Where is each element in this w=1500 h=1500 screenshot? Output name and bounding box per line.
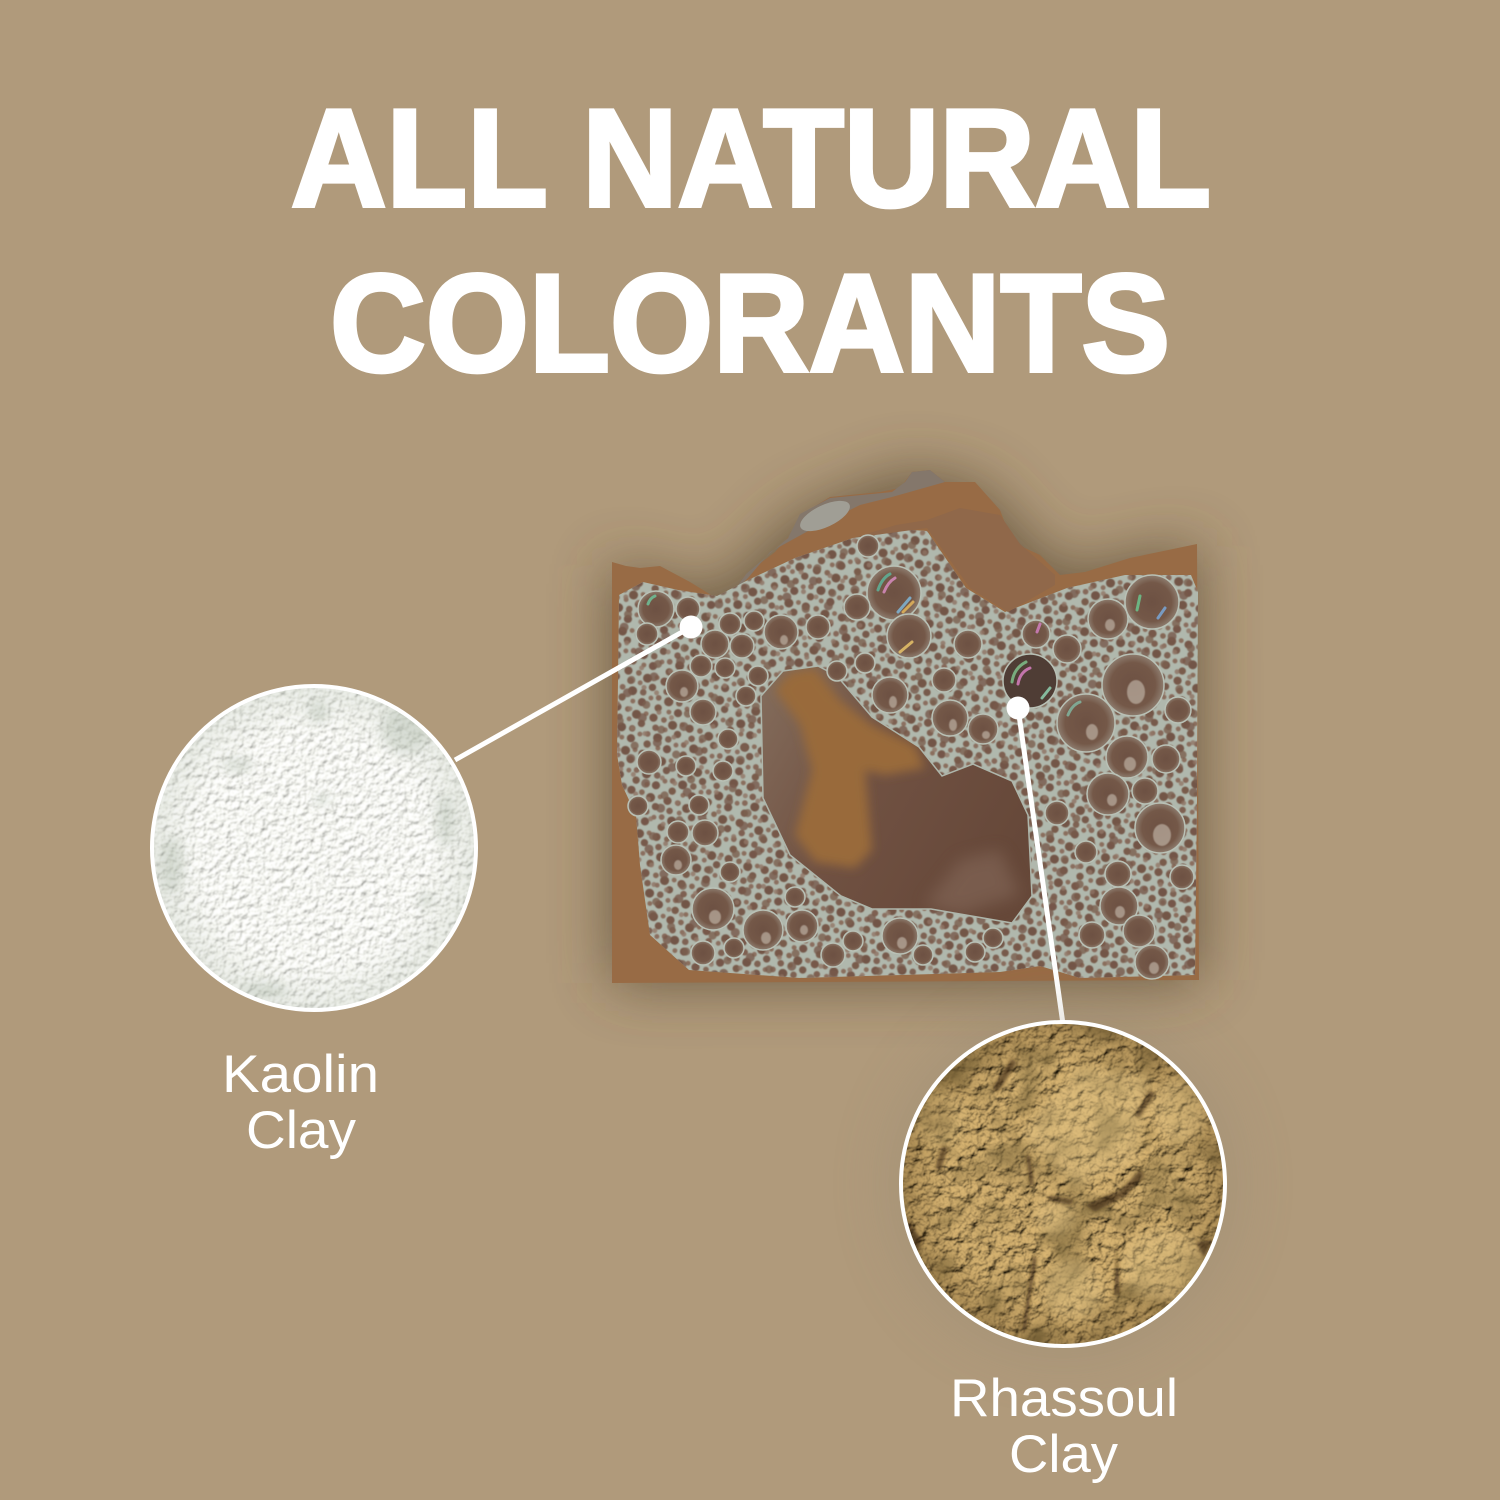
pale marks [932,852,1016,914]
connector line: rhassoul [1018,708,1063,1024]
kaolin clay photo circle [150,684,478,1012]
dark crevices [906,1058,1213,1330]
foam rim around pool [761,666,1032,923]
connector line: kaolin [455,627,691,760]
centre pool [762,666,1032,922]
soap body [612,470,1199,983]
grey soap ridge [732,470,945,594]
title: ALL NATURAL [291,81,1211,236]
kaolin label: Clay [246,1101,357,1160]
connector dot: rhassoul [1006,696,1030,720]
top clay patch [853,508,1055,612]
orange clay streak [775,668,925,868]
rhassoul clay photo circle [899,1020,1228,1348]
title [291,81,1211,401]
rhassoul label: Rhassoul [950,1369,1178,1428]
rhassoul label: Clay [1009,1425,1119,1484]
bubble highlights [674,619,1171,974]
iridescent reflections [648,574,1165,715]
soap bar photo [600,470,1210,990]
bright lumps [912,1067,1209,1320]
connector dot: kaolin [680,616,702,638]
soap shadow [612,470,1199,983]
foam layer [600,520,1210,990]
foam speckle [796,495,854,537]
large bubbles [628,535,1194,979]
kaolin label: Kaolin [222,1045,379,1104]
rhassoul label [950,1369,1178,1484]
kaolin label [222,1045,379,1160]
rhassoul shadow [891,1012,1235,1356]
title: COLORANTS [330,246,1170,401]
